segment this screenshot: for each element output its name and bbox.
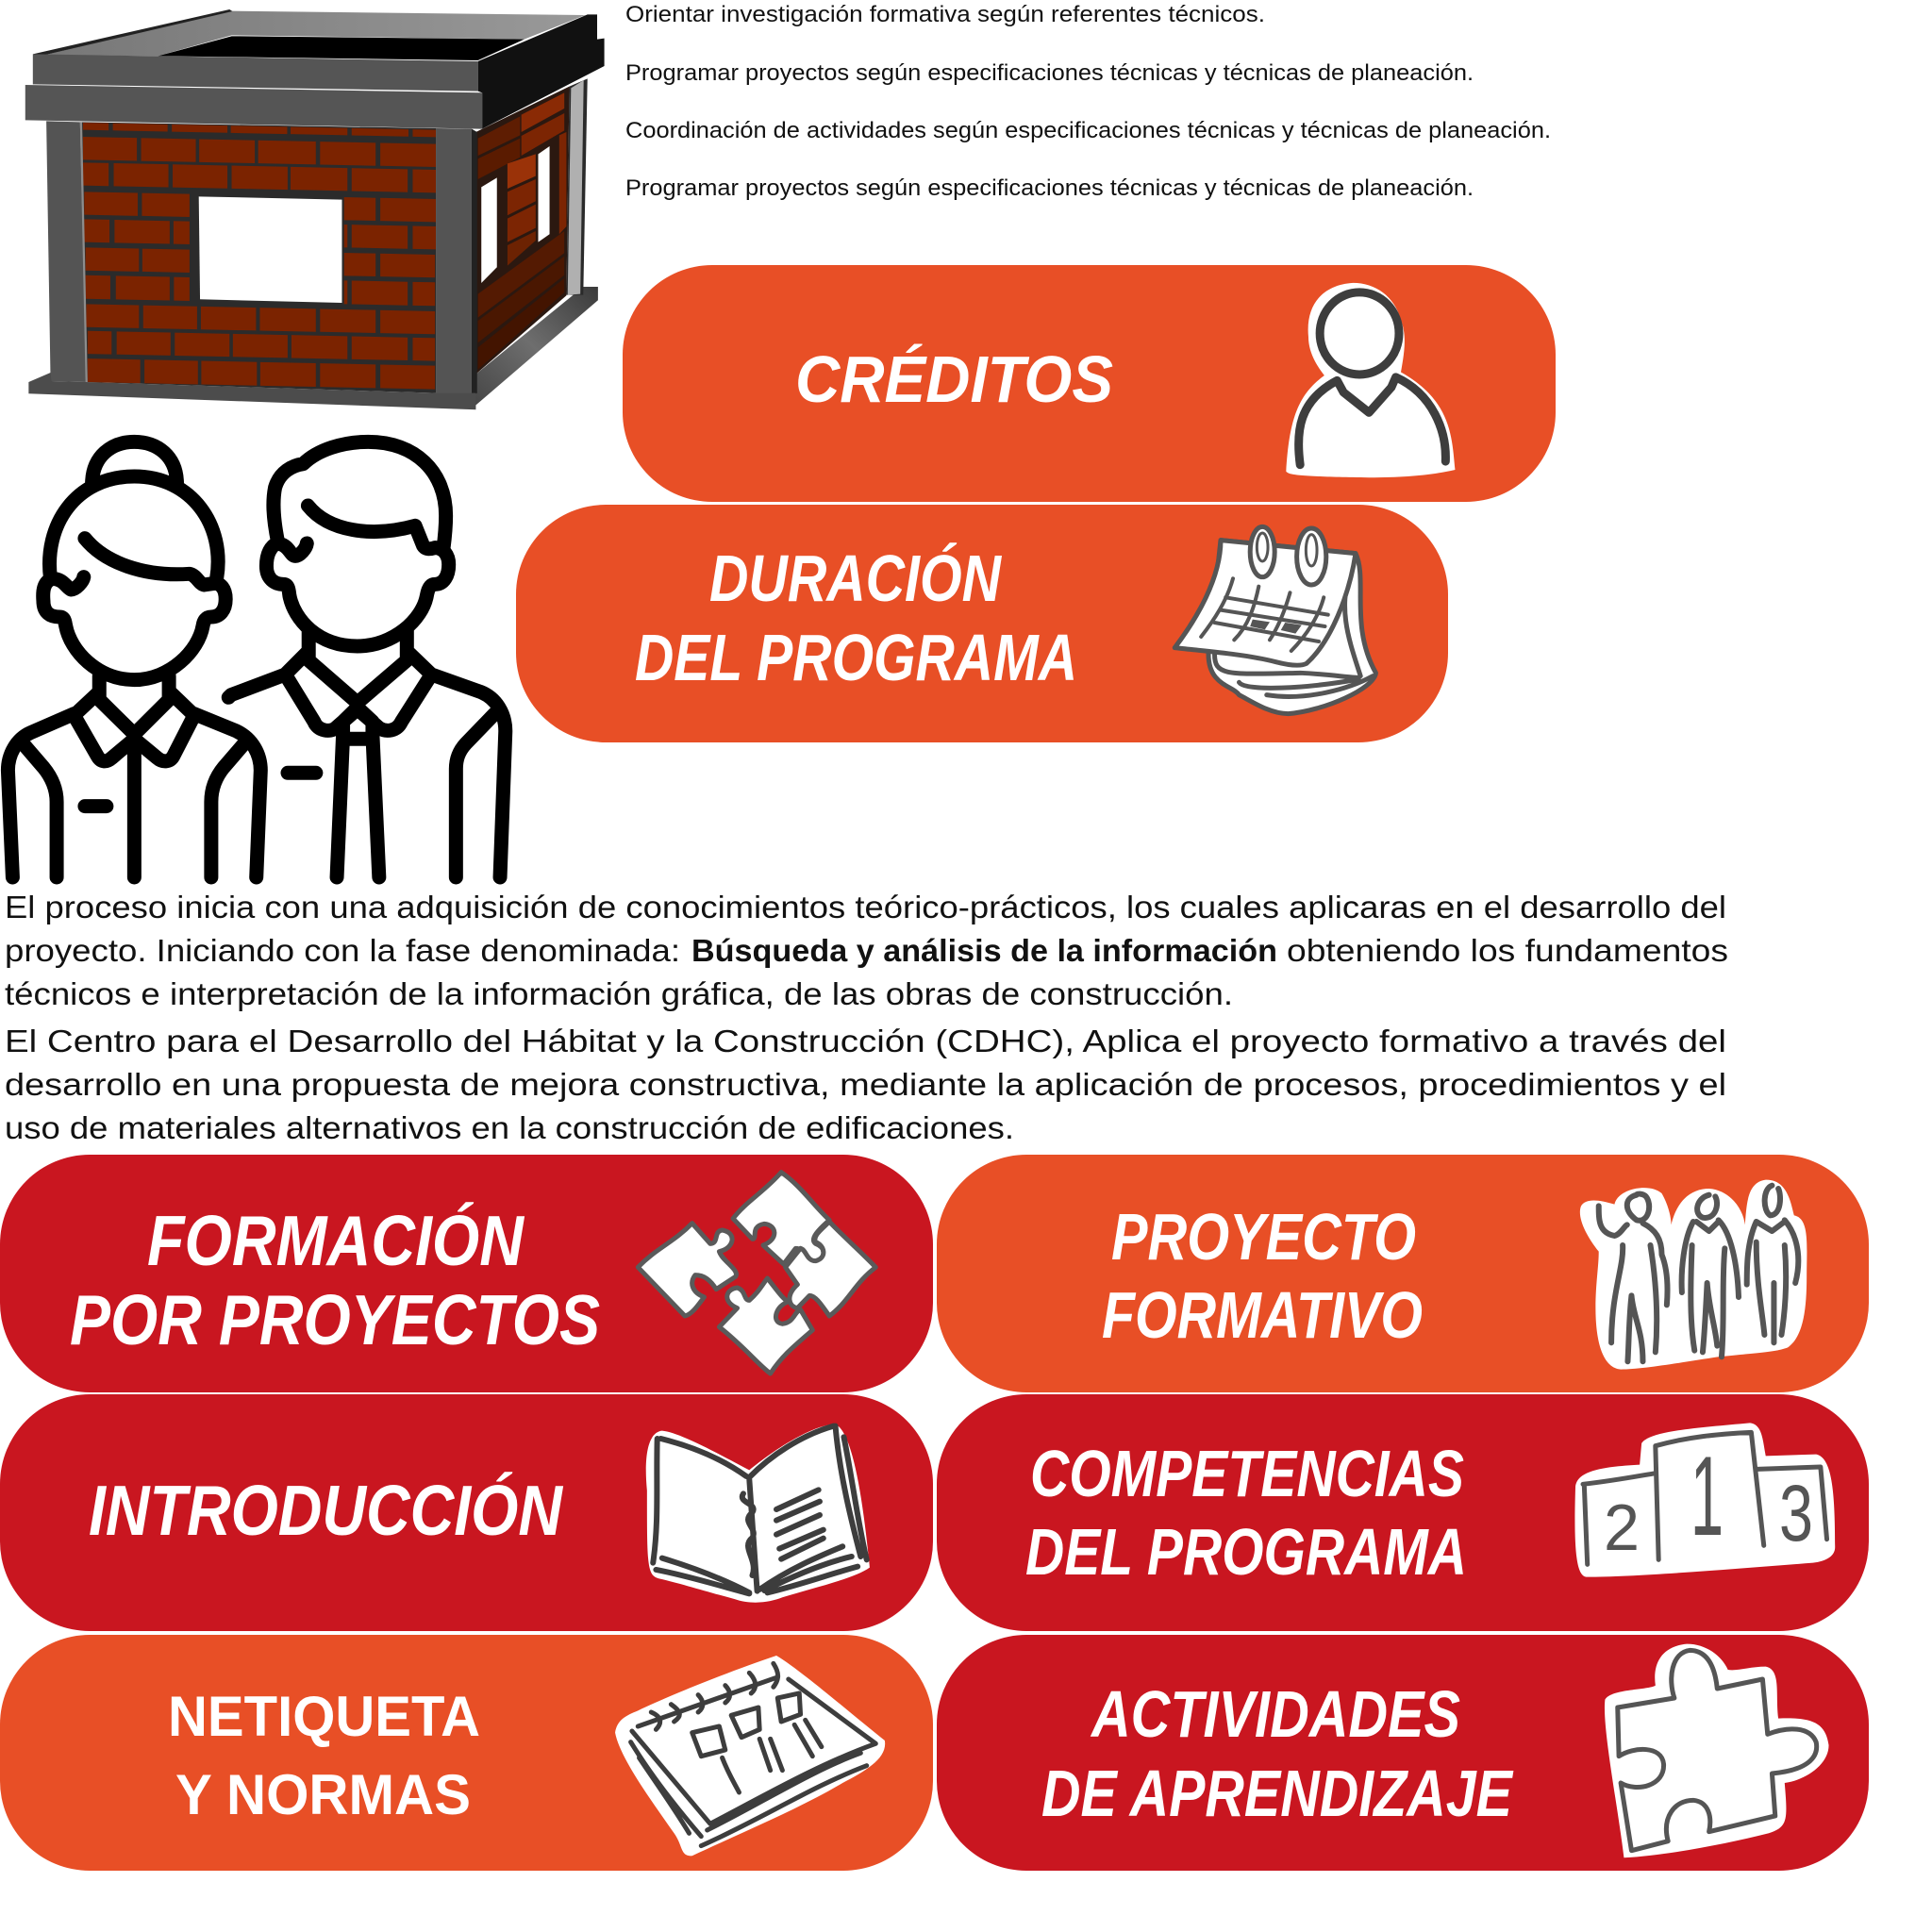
panel: actividades de aprendizaje xyxy=(937,1635,1869,1871)
text block: objectives list: Programar proyectos según especificaciones técnicas y técnicas de planeación. xyxy=(625,175,1474,201)
heading: formación por proyectos xyxy=(70,1201,600,1359)
text block: intro paragraphs: proyecto. Iniciando con la fase denominada: xyxy=(5,933,680,968)
figure: man xyxy=(228,441,506,877)
heading: duración del programa xyxy=(635,541,1077,694)
heading: proyecto formativo: PROYECTO xyxy=(1111,1200,1416,1274)
illustration: two people xyxy=(8,441,506,877)
icon: four puzzle pieces xyxy=(638,1173,875,1374)
text block: intro paragraphs: uso de materiales alternativos en la construcción de edificaciones. xyxy=(5,1110,1014,1145)
text block: intro paragraphs: El proceso inicia con una adquisición de conocimientos teórico-prácticos, los cuales aplicaras en el desarrollo del xyxy=(5,890,1726,924)
panel: netiqueta y normas xyxy=(0,1635,933,1871)
panel: formación por proyectos xyxy=(0,1155,933,1392)
heading: competencias del programa: COMPETENCIAS xyxy=(1030,1437,1464,1510)
icon: three people xyxy=(1580,1180,1807,1370)
icon: puzzle piece xyxy=(1605,1644,1829,1857)
heading: netiqueta y normas: Y NORMAS xyxy=(175,1763,471,1826)
panel: créditos xyxy=(623,265,1556,502)
panel: introducción xyxy=(0,1394,933,1631)
icon labels: podium digits: 2 xyxy=(1604,1491,1640,1564)
icon: open book xyxy=(646,1424,870,1603)
heading: duración del programa: DEL PROGRAMA xyxy=(635,621,1077,694)
heading: formación por proyectos: POR PROYECTOS xyxy=(70,1280,600,1359)
heading: actividades de aprendizaje: DE APRENDIZAJE xyxy=(1041,1757,1514,1830)
text block: objectives list: Programar proyectos según especificaciones técnicas y técnicas de planeación. xyxy=(625,60,1474,86)
icon labels: podium digits: 1 xyxy=(1690,1433,1724,1559)
text block: intro paragraphs: técnicos e interpretación de la información gráfica, de las obras de construcción. xyxy=(5,976,1233,1011)
heading: duración del programa: DURACIÓN xyxy=(709,541,1002,615)
icon: spiral notebook xyxy=(615,1656,885,1856)
panel: competencias del programa xyxy=(937,1394,1869,1631)
heading: competencias del programa: DEL PROGRAMA xyxy=(1025,1515,1467,1589)
text block: intro paragraphs: obteniendo los fundamentos xyxy=(1287,933,1728,968)
heading: actividades de aprendizaje: ACTIVIDADES xyxy=(1090,1677,1460,1751)
illustration: brick house xyxy=(25,9,605,409)
text block: intro paragraphs: El Centro para el Desarrollo del Hábitat y la Construcción (CDHC), Aplica el proyecto formativo a través del xyxy=(5,1024,1726,1058)
heading: competencias del programa xyxy=(1025,1437,1467,1589)
text block: objectives list xyxy=(625,2,1551,201)
icon: person xyxy=(1286,283,1455,477)
text block: intro paragraphs: desarrollo en una propuesta de mejora constructiva, mediante la aplicación de procesos, procedimientos y el xyxy=(5,1067,1726,1102)
heading: introducción: INTRODUCCIÓN xyxy=(89,1471,564,1550)
heading: proyecto formativo: FORMATIVO xyxy=(1102,1278,1423,1352)
heading: formación por proyectos: FORMACIÓN xyxy=(147,1201,525,1280)
text block: objectives list: Coordinación de actividades según especificaciones técnicas y técnicas de planeación. xyxy=(625,118,1551,143)
icon: calendar xyxy=(1174,526,1375,714)
panel: duración del programa xyxy=(516,505,1448,742)
text block: intro paragraphs xyxy=(5,890,1728,1145)
heading: actividades de aprendizaje xyxy=(1041,1677,1514,1830)
figure: woman xyxy=(8,441,260,877)
heading: créditos: CRÉDITOS xyxy=(795,342,1113,416)
icon labels: podium digits: 3 xyxy=(1779,1469,1813,1557)
text block: intro paragraphs: Búsqueda y análisis de la información xyxy=(691,933,1277,968)
heading: netiqueta y normas: NETIQUETA xyxy=(168,1685,480,1748)
text block: objectives list: Orientar investigación formativa según referentes técnicos. xyxy=(625,2,1265,27)
heading: proyecto formativo xyxy=(1102,1200,1423,1352)
icon: podium xyxy=(1574,1423,1835,1577)
icon labels: podium digits xyxy=(1604,1433,1813,1564)
panel: proyecto formativo xyxy=(937,1155,1869,1392)
heading: netiqueta y normas xyxy=(168,1685,480,1826)
